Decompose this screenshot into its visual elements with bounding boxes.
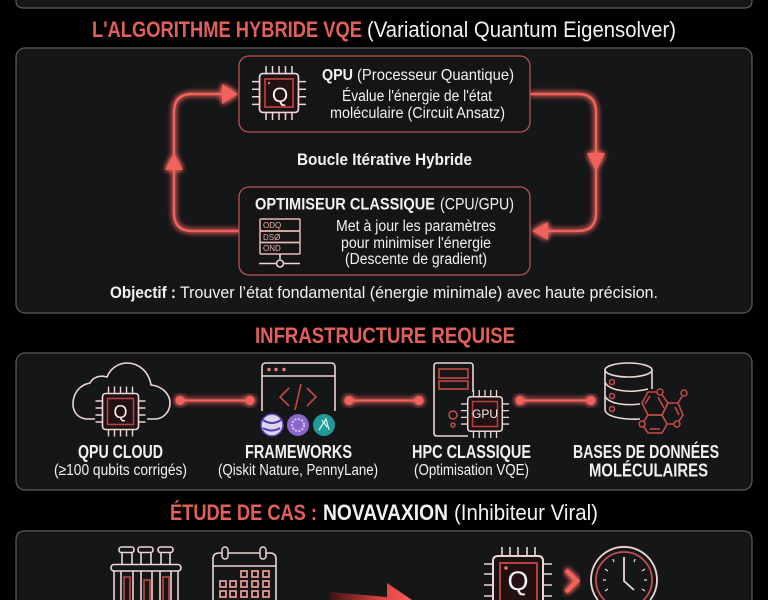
QPU text: (Processeur Quantique) [357, 67, 514, 84]
objective line: Trouver l’état fondamental (énergie minimale) avec haute précision. [180, 283, 658, 302]
frameworks label [218, 442, 378, 479]
panel: top section edge [16, 0, 752, 8]
icon: quantum chip large: Q [507, 566, 529, 596]
QPU box [239, 56, 530, 132]
optimiser box [239, 187, 530, 275]
icon: frameworks window [261, 363, 335, 436]
optimiser text: OPTIMISEUR CLASSIQUE [255, 194, 435, 214]
HPC label [412, 442, 531, 479]
objective line: Objectif : [110, 283, 176, 302]
icon: molecular database [605, 363, 687, 433]
icon: HPC tower with GPU: GPU [472, 407, 498, 421]
icon: server: OND [263, 244, 281, 253]
heading: case study: (Inhibiteur Viral) [454, 500, 598, 525]
icon: QPU cloud: Q [113, 402, 128, 422]
HPC label: HPC CLASSIQUE [412, 442, 531, 462]
database label [573, 441, 719, 480]
icon: clock [591, 547, 657, 600]
heading: case study [170, 500, 598, 525]
optimiser text [255, 194, 514, 268]
icon: quantum chip [252, 66, 306, 120]
loop label: Boucle Itérative Hybride [297, 150, 472, 169]
panel: VQE hybrid loop [16, 48, 752, 313]
connector 3 [516, 396, 596, 405]
heading: VQE algorithm: (Variational Quantum Eigensolver) [367, 17, 676, 42]
icon: chevron [566, 570, 577, 592]
QPU cloud label: QPU CLOUD [78, 442, 163, 462]
arrow: QPU to optimiser [530, 94, 605, 240]
database label: MOLÉCULAIRES [589, 460, 708, 480]
frameworks label: FRAMEWORKS [245, 442, 352, 462]
panel: case study [16, 531, 752, 600]
connector 2 [344, 396, 424, 405]
HPC label: (Optimisation VQE) [414, 462, 529, 479]
frameworks label: (Qiskit Nature, PennyLane) [218, 462, 378, 479]
QPU text: QPU [322, 67, 353, 84]
icon: server [259, 219, 300, 267]
QPU text [322, 67, 514, 122]
heading: VQE algorithm: L'ALGORITHME HYBRIDE VQE [92, 17, 362, 42]
QPU cloud label [54, 442, 187, 479]
icon: test tubes [111, 547, 181, 600]
heading: case study: NOVAVAXION [323, 500, 448, 525]
icon: calendar [213, 547, 276, 600]
QPU text: Évalue l'énergie de l'état [342, 88, 493, 105]
optimiser text: (CPU/GPU) [440, 194, 514, 214]
icon: quantum chip: Q [272, 84, 288, 107]
optimiser text: Met à jour les paramètres [336, 218, 496, 235]
heading: infrastructure: INFRASTRUCTURE REQUISE [255, 323, 515, 348]
optimiser text: (Descente de gradient) [345, 251, 487, 268]
database label: BASES DE DONNÉES [573, 441, 719, 462]
optimiser text: pour minimiser l'énergie [341, 235, 491, 252]
icon: QPU cloud [73, 363, 170, 436]
QPU cloud label: (≥100 qubits corrigés) [54, 462, 187, 479]
panel: infrastructure [16, 353, 752, 490]
arrow: optimiser to QPU [165, 84, 239, 231]
icon: quantum chip large [484, 547, 552, 600]
connector 1 [176, 396, 254, 405]
icon: server: DSØ [263, 233, 280, 242]
heading: VQE algorithm [92, 17, 676, 42]
icon: server: ODQ [263, 221, 281, 230]
heading: case study: ÉTUDE DE CAS : [170, 500, 317, 525]
arrow: acceleration [330, 583, 412, 600]
icon: HPC tower with GPU [434, 363, 509, 438]
QPU text: moléculaire (Circuit Ansatz) [330, 105, 505, 122]
